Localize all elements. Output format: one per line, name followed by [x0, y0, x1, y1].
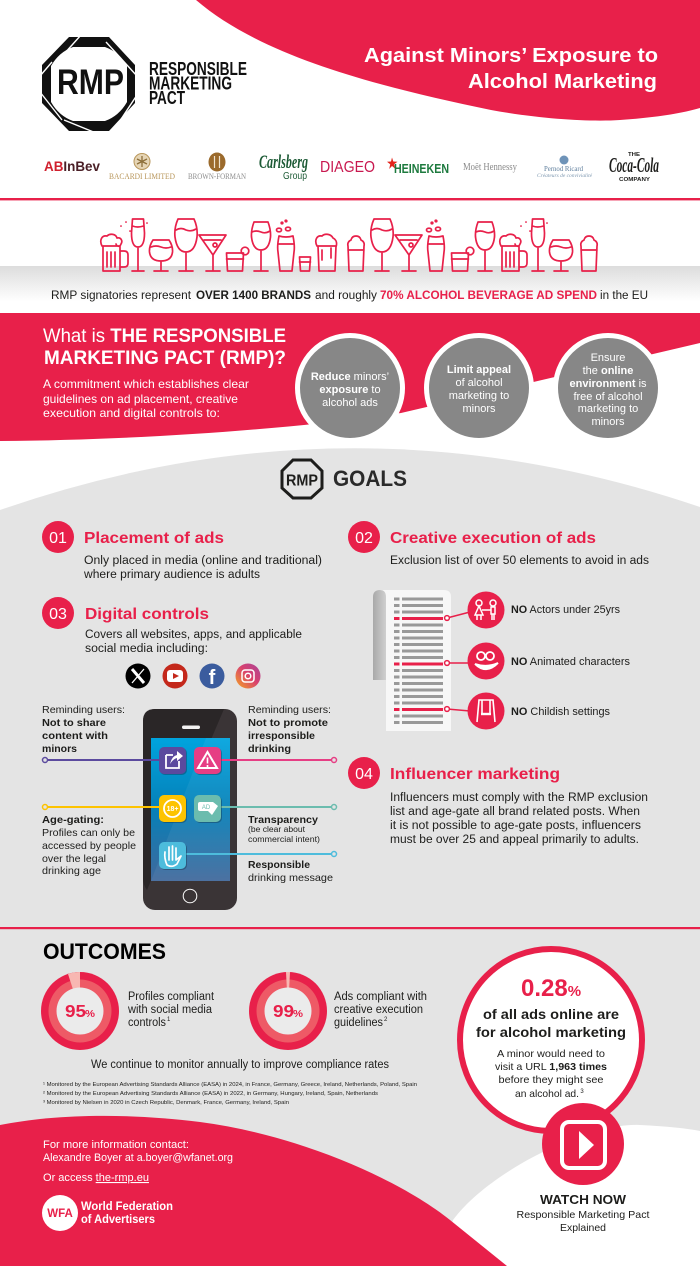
donut chart: 95% — [41, 972, 119, 1050]
callout: not to promote irresponsible drinking: drinking — [248, 743, 291, 755]
callout: transparency: (be clear about — [248, 825, 306, 834]
callout: age-gating: accessed by people — [42, 840, 136, 852]
social media icons — [126, 664, 260, 689]
callout: 0.28% stat circle: 3 — [580, 1089, 584, 1095]
title — [364, 45, 658, 93]
signatories statement: and roughly — [315, 290, 377, 302]
callout: not to share content: Not to share — [42, 717, 106, 729]
callout: 0.28% stat circle: visit a URL 1,963 times — [495, 1061, 607, 1073]
RMP logo: MARKETING — [149, 74, 232, 94]
watch now text: Responsible Marketing Pact — [516, 1209, 650, 1221]
footer red swoosh — [0, 1116, 507, 1266]
donut chart: 99%: 99 — [273, 1001, 294, 1021]
donut label: ads: Ads compliant with — [334, 991, 427, 1003]
goal circle: online environment — [556, 336, 660, 440]
goal circle: limit appeal: of alcohol — [455, 377, 503, 389]
goal circle: online environment: marketing to — [578, 403, 638, 415]
footnotes: ¹ Monitored by the European Advertising Standards Alliance (EASA) in 2024, in France, Germany, Greece, Ireland, Netherlands, Poland, Spain — [43, 1082, 417, 1088]
watch now text: Explained — [560, 1222, 606, 1234]
logo: Brown-Forman: BROWN-FORMAN — [188, 171, 246, 181]
donut label: profiles: controls — [128, 1017, 166, 1029]
panel heading: what is RMP: What is THE RESPONSIBLE — [43, 325, 286, 347]
callout: not to share content: minors — [42, 743, 77, 755]
goal 02: creative execution: 02 — [355, 530, 373, 547]
callout: age-gating: drinking age — [42, 865, 101, 877]
intro text: A commitment which establishes clear — [43, 377, 249, 391]
goal circle: limit appeal: Limit appeal — [447, 364, 511, 376]
signatory logos — [44, 152, 659, 183]
RMP logo: PACT — [149, 88, 185, 108]
exclusion: animated characters — [445, 642, 630, 680]
callout: age-gating: over the legal — [42, 853, 106, 865]
callout: not to promote irresponsible drinking: irresponsible — [248, 730, 315, 742]
callout: not to promote irresponsible drinking: Not to promote — [248, 717, 328, 729]
donut chart: 95%: 95 — [65, 1001, 86, 1021]
donut label: profiles: 1 — [167, 1017, 171, 1023]
donut label: profiles: with social media — [127, 1004, 213, 1016]
goal 01: placement of ads: Placement of ads — [84, 530, 224, 547]
goal 03: digital controls: social media including: — [85, 643, 208, 655]
footnotes — [43, 1082, 417, 1106]
goal circle: reduce exposure: Reduce minors’ — [311, 371, 389, 383]
callout: transparency: AD — [202, 805, 211, 811]
goal 02: creative execution: Creative execution of ads — [390, 530, 596, 547]
goal circle: online environment: the online — [583, 365, 633, 377]
outcomes heading: OUTCOMES — [43, 939, 166, 964]
donut label: ads: creative execution — [334, 1004, 423, 1016]
goal 04: influencer marketing: Influencer marketing — [390, 766, 560, 783]
logo: Coca-Cola: THE — [628, 152, 640, 158]
goal 01: placement of ads: Only placed in media (online and traditional) — [84, 555, 322, 567]
WFA logo: WFA — [47, 1208, 73, 1220]
contact text: Or access the-rmp.eu — [43, 1172, 149, 1184]
goal 03: digital controls: Digital controls — [85, 606, 209, 623]
exclusion: actors under 25 — [445, 592, 620, 628]
logo: Pernod Ricard: Pernod Ricard — [544, 164, 583, 173]
logo: Coca-Cola — [609, 152, 659, 183]
intro text: guidelines on ad placement, creative — [43, 392, 238, 406]
logo: Pernod Ricard — [537, 156, 593, 179]
icon: YouTube — [162, 664, 188, 688]
row of glasses — [101, 219, 597, 271]
panel heading: what is RMP — [43, 325, 286, 369]
signatories statement: 70% ALCOHOL BEVERAGE AD SPEND — [380, 290, 597, 302]
exclusion: childish settings — [445, 692, 610, 730]
callout: 0.28% stat circle: 0.28% — [521, 975, 581, 1002]
logo: Heineken — [387, 158, 449, 176]
title: Alcohol Marketing — [468, 71, 657, 93]
white hill bottom right — [440, 1125, 700, 1266]
callout: age-gating: Profiles can only be — [42, 827, 135, 839]
goal 03: digital controls: 03 — [49, 606, 67, 623]
logo: Pernod Ricard: Créateurs de convivialité — [537, 174, 593, 179]
exclusion: childish settings: NO Childish settings — [511, 706, 610, 718]
goals heading: RMP — [286, 472, 318, 490]
exclusion list document — [373, 590, 451, 731]
donut label: profiles — [127, 991, 215, 1029]
goal 03: digital controls — [42, 597, 302, 655]
WFA logo — [42, 1195, 173, 1231]
callout: not to share content — [42, 704, 187, 775]
grey gradient band — [0, 266, 700, 313]
callout: 0.28% stat circle: for alcohol marketing — [476, 1025, 626, 1040]
goal circle: online environment: Ensure — [591, 352, 625, 364]
goal 04: influencer marketing: it is not possible to age-gate posts, influencers — [390, 820, 641, 832]
goals heading — [282, 460, 407, 498]
intro text — [43, 377, 249, 420]
signatories statement: OVER 1400 BRANDS — [196, 290, 311, 302]
logo: Carlsberg — [259, 152, 308, 182]
goal circle: online environment: environment is — [569, 378, 647, 390]
exclusion: actors under 25: NO Actors under 25yrs — [511, 604, 620, 616]
donut label: ads: guidelines — [334, 1017, 383, 1029]
logo: Coca-Cola: Coca-Cola — [609, 153, 659, 177]
logo: AB InBev: ABInBev — [44, 158, 100, 174]
phone — [143, 709, 237, 910]
callout: 0.28% stat circle: A minor would need to — [497, 1048, 605, 1060]
goal 01: placement of ads: 01 — [49, 530, 67, 547]
contact text: Alexandre Boyer at a.boyer@wfanet.org — [43, 1152, 233, 1164]
goal circle: online environment: free of alcohol — [573, 391, 643, 403]
exclusion: animated characters: NO Animated characters — [511, 656, 630, 668]
goal circle: reduce exposure: exposure to — [319, 384, 381, 396]
icon: Facebook: f — [209, 667, 216, 689]
logo: Heineken: HEINEKEN — [394, 162, 449, 176]
RMP logo: RMP — [57, 63, 124, 102]
WFA logo: of Advertisers — [81, 1212, 155, 1226]
goals heading: GOALS — [333, 466, 407, 491]
donut label: profiles: Profiles compliant — [128, 991, 215, 1003]
contact text — [43, 1139, 233, 1184]
donut chart: 99% — [249, 972, 327, 1050]
donut chart: 99%: % — [293, 1009, 303, 1020]
signatories statement: RMP signatories represent — [51, 290, 192, 302]
red divider — [0, 198, 700, 200]
goal 01: placement of ads — [42, 521, 322, 581]
callout: age-gating: Age-gating: — [42, 814, 104, 826]
signatories statement: in the EU — [600, 290, 648, 302]
goal 01: placement of ads: where primary audience is adults — [83, 569, 260, 581]
watch now text: WATCH NOW — [540, 1192, 627, 1207]
goal 03: digital controls: Covers all websites, apps, and applicable — [85, 629, 302, 641]
donut label: ads: 2 — [384, 1017, 388, 1023]
logo: Brown-Forman — [188, 152, 246, 181]
intro text: execution and digital controls to: — [43, 406, 220, 420]
goal circle: limit appeal: minors — [462, 403, 496, 415]
logo: Coca-Cola: COMPANY — [619, 177, 650, 183]
logo: Bacardi: BACARDI LIMITED — [109, 171, 175, 181]
callout: age-gating: 18+ — [167, 806, 178, 813]
logo: Moet Hennessy: Moët Hennessy — [463, 162, 518, 173]
goal circle: limit appeal — [426, 336, 532, 440]
callout: responsible drinking message: drinking message — [248, 872, 333, 884]
callout: 0.28% stat circle: an alcohol ad. — [515, 1088, 579, 1100]
contact text: For more information contact: — [43, 1139, 189, 1151]
signatories statement — [51, 290, 648, 302]
outcomes divider — [0, 927, 700, 929]
callout: responsible drinking message — [159, 842, 336, 884]
logo: Diageo: DIAGEO — [320, 159, 375, 176]
icon: X — [126, 664, 150, 688]
footnotes: ² Monitored by the European Advertising Standards Alliance (EASA) in 2022, in Germany, Hungary, Ireland, Spain, Netherlands — [43, 1091, 378, 1097]
footnotes: ³ Monitored by Nielsen in 2020 in Czech Republic, Denmark, France, Germany, Ireland, Spain — [43, 1100, 289, 1106]
RMP logo — [40, 35, 247, 133]
goal 02: creative execution: Exclusion list of over 50 elements to avoid in ads — [390, 555, 649, 567]
goal 04: influencer marketing: list and age-gate all brand related posts. When — [390, 806, 640, 818]
logo: Bacardi — [109, 154, 175, 181]
callout: not to promote irresponsible drinking — [194, 704, 336, 775]
goal 04: influencer marketing: Influencers must comply with the RMP exclusion — [390, 792, 648, 804]
goal 04: influencer marketing — [348, 757, 648, 846]
callout: 0.28% stat circle — [460, 949, 642, 1131]
WFA logo: World Federation — [81, 1199, 173, 1213]
callout: not to share content: Reminding users: — [42, 704, 125, 716]
goal 02: creative execution — [348, 521, 649, 567]
logo: Carlsberg: Group — [283, 170, 307, 182]
icon: Instagram — [236, 664, 260, 688]
goal 04: influencer marketing: must be over 25 and appeal primarily to adults. — [390, 834, 639, 846]
header red swoosh — [196, 0, 700, 121]
callout: age-gating — [42, 795, 187, 877]
donut chart: 95%: % — [85, 1009, 95, 1020]
callout: 0.28% stat circle: of all ads online are — [483, 1007, 620, 1022]
callout: transparency — [194, 795, 336, 844]
goal circle: reduce exposure — [298, 336, 402, 440]
callout: not to share content: content with — [42, 730, 108, 742]
panel: what is RMP red background — [0, 313, 700, 441]
icon: play button — [542, 1103, 624, 1185]
goal circle: online environment: minors — [591, 416, 625, 428]
callout: not to promote irresponsible drinking: Reminding users: — [248, 704, 331, 716]
title: Against Minors’ Exposure to — [364, 45, 658, 67]
monitoring statement: We continue to monitor annually to improve compliance rates — [91, 1059, 389, 1071]
callout: transparency: Transparency — [248, 814, 318, 826]
panel: goals grey background — [0, 448, 700, 1266]
goal circle: reduce exposure: alcohol ads — [322, 397, 378, 409]
goal 04: influencer marketing: 04 — [355, 766, 373, 783]
goal circle: limit appeal: marketing to — [449, 390, 509, 402]
panel heading: what is RMP: MARKETING PACT (RMP)? — [44, 347, 286, 369]
callout: transparency: commercial intent) — [248, 835, 320, 844]
RMP logo: RESPONSIBLE — [149, 59, 247, 79]
callout: responsible drinking message: Responsible — [248, 859, 310, 871]
donut label: ads — [334, 991, 427, 1029]
watch now text — [516, 1192, 650, 1234]
callout: 0.28% stat circle: before they might see — [498, 1074, 604, 1086]
logo: Carlsberg: Carlsberg — [259, 152, 308, 173]
